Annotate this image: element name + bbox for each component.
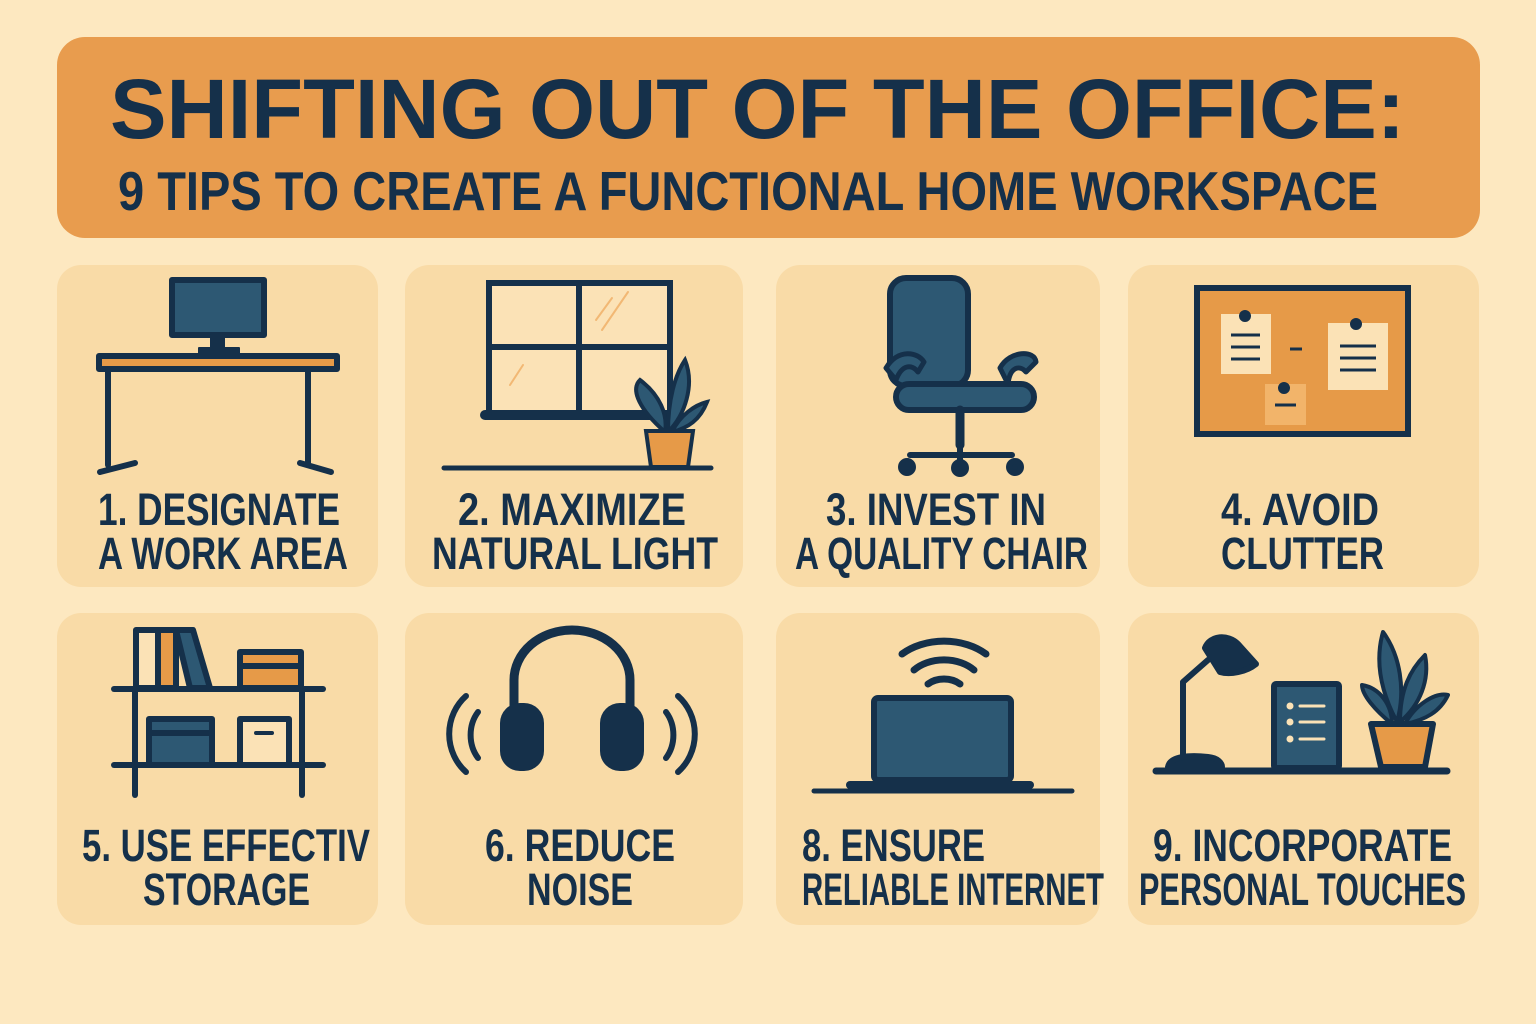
panel: avoid clutter <box>1128 265 1479 587</box>
label 1: 1. DESIGNATE <box>98 484 340 535</box>
label 5: 5. USE EFFECTIV <box>82 820 370 871</box>
label 4: 4. AVOID <box>1221 484 1379 535</box>
panel: reliable internet: RELIABLE INTERNET <box>802 864 1104 915</box>
icon: office chair <box>886 278 1036 474</box>
header banner <box>57 37 1480 238</box>
icon: desk with monitor <box>99 280 337 472</box>
panel: reliable internet <box>776 613 1104 925</box>
panel: designate a work area: A WORK AREA <box>98 528 348 579</box>
panel: quality chair: A QUALITY CHAIR <box>795 528 1088 579</box>
title: SHIFTING OUT OF THE OFFICE: <box>110 62 1405 156</box>
panel: reduce noise: NOISE <box>527 864 633 915</box>
label 3: 3. INVEST IN <box>826 484 1046 535</box>
icon: window with plant <box>444 283 711 468</box>
panel: reduce noise <box>405 613 743 925</box>
icon: laptop with wifi <box>814 641 1072 791</box>
panel: effective storage: STORAGE <box>143 864 310 915</box>
panel: effective storage <box>57 613 378 925</box>
panel: personal touches <box>1128 613 1479 925</box>
icon: shelves <box>114 630 323 795</box>
icon: corkboard <box>1197 288 1408 434</box>
panel: avoid clutter: CLUTTER <box>1221 528 1384 579</box>
icon: lamp, notebook, plant <box>1156 632 1448 771</box>
label 8: 8. ENSURE <box>802 820 985 871</box>
label 6: 6. REDUCE <box>485 820 675 871</box>
panel: maximize natural light <box>405 265 743 587</box>
label 2: 2. MAXIMIZE <box>458 484 686 535</box>
panel: designate a work area <box>57 265 378 587</box>
panel: quality chair <box>776 265 1100 587</box>
icon: headphones <box>449 630 695 772</box>
label 9: 9. INCORPORATE <box>1153 820 1452 871</box>
panel: maximize natural light: NATURAL LIGHT <box>432 528 718 579</box>
